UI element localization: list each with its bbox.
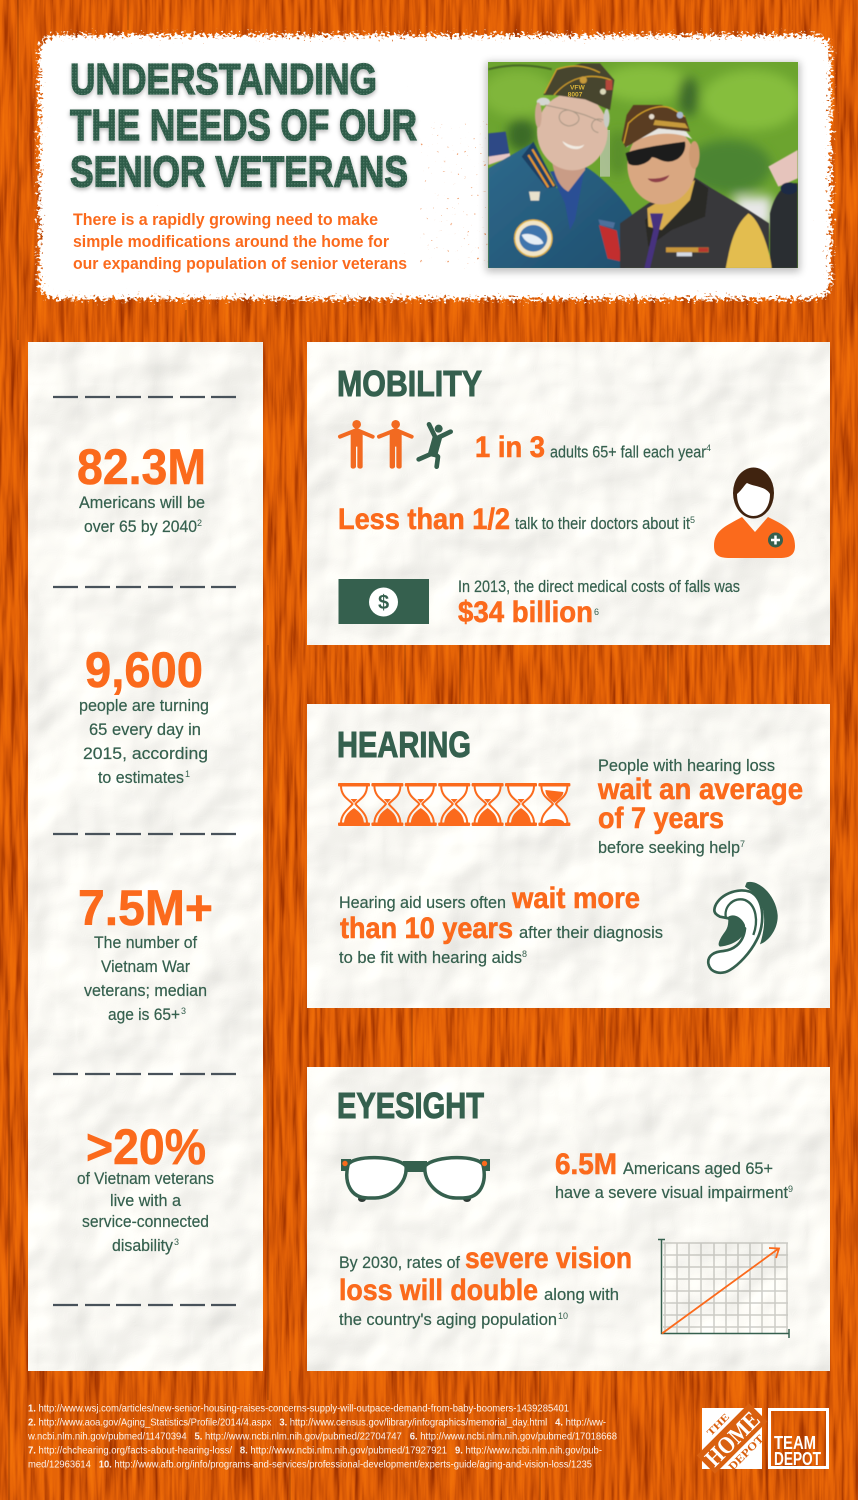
logo: The Home Depot: HOME <box>701 1407 766 1472</box>
stat: >20%: live with a <box>110 1192 182 1210</box>
footnote references: med/12963614 10. http://www.afb.org/info/programs-and-services/professional-development/experts-guide/aging-and-vision-loss/1235 <box>28 1460 592 1470</box>
text: severe vision loss will double: along with <box>544 1286 619 1304</box>
panel: eyesight <box>307 1067 830 1371</box>
line chart: doubling trend <box>658 1240 789 1338</box>
panel: hearing <box>307 704 830 1008</box>
icon: glasses <box>341 1158 490 1202</box>
stat: >20% <box>77 1119 214 1255</box>
text: wait more than 10 years: Hearing aid users often <box>339 894 506 912</box>
stat: 1 in 3 adults <box>475 431 711 464</box>
stat: 7.5M+: veterans; median <box>84 982 207 1000</box>
stat: 6.5M: have a severe visual impairment <box>555 1184 788 1202</box>
stat: 1 in 3 adults: adults 65+ fall each year <box>550 444 706 462</box>
text: wait more than 10 years: after their diagnosis <box>519 924 663 942</box>
logo: The Home Depot: DEPOT <box>726 1432 767 1473</box>
heading: eyesight: EYESIGHT <box>337 1085 484 1126</box>
stat: 7.5M+: The number of <box>94 934 197 952</box>
intro text: simple modifications around the home for <box>73 232 389 251</box>
stat: 7.5M+: age is 65+ <box>108 1006 180 1024</box>
text: severe vision loss will double: By 2030, rates of <box>339 1254 460 1272</box>
logo: The Home Depot <box>689 1395 777 1483</box>
photo: two senior veterans: 8007 <box>568 91 583 98</box>
stat: 9,600: people are turning <box>79 697 209 715</box>
divider stitches <box>53 397 236 1305</box>
panel: mobility <box>307 342 830 645</box>
stat: >20%: 3 <box>174 1237 179 1247</box>
stat: 6.5M: 6.5M <box>555 1148 617 1181</box>
stat: >20%: >20% <box>86 1119 206 1175</box>
stat: 6.5M <box>555 1148 793 1202</box>
stat: 9,600 <box>79 642 209 787</box>
text: severe vision loss will double: severe vision <box>465 1242 632 1275</box>
logo: The Home Depot: THE <box>705 1411 732 1438</box>
title: THE NEEDS OF OUR <box>70 101 417 150</box>
text: wait more than 10 years: than 10 years <box>340 912 513 945</box>
stat: less than half: Less than 1/2 <box>338 503 510 536</box>
text: severe vision loss will double: loss will double <box>339 1274 538 1307</box>
stat: 82.3M: Americans will be <box>79 494 205 512</box>
stat: >20%: service-connected <box>82 1213 209 1231</box>
stat: 9,600: 2015, according <box>83 745 208 763</box>
stat: 7.5M+ <box>78 880 213 1024</box>
stat: 1 in 3 adults: 4 <box>706 443 711 453</box>
text: wait an average of 7 years: 7 <box>740 839 745 849</box>
icon: ear with hearing aid <box>708 882 778 973</box>
stat: 82.3M: 82.3M <box>77 439 206 495</box>
heading: mobility: MOBILITY <box>337 363 482 404</box>
stat: 9,600: to estimates <box>98 769 184 787</box>
stat: 9,600: 65 every day in <box>89 721 201 739</box>
icon: dollar bill <box>338 579 429 624</box>
text: wait an average of 7 years: of 7 years <box>598 802 724 835</box>
text: severe vision loss will double <box>339 1242 632 1329</box>
text: severe vision loss will double: 10 <box>558 1311 568 1321</box>
photo: two senior veterans <box>482 62 802 272</box>
stat: 82.3M: 2 <box>197 518 202 528</box>
footnote references: 1. http://www.wsj.com/articles/new-senior-housing-raises-concerns-supply-will-outpace-demand-from-baby-boomers-1439285401 <box>28 1404 569 1414</box>
stat: medical costs: $34 billion <box>458 596 593 629</box>
footnote references: 7. http://chchearing.org/facts-about-hearing-loss/ 8. http://www.ncbi.nlm.nih.gov/pubmed/17927921 9. http://www.ncbi.nlm.nih.gov/pub- <box>28 1446 602 1456</box>
intro text: There is a rapidly growing need to make <box>73 210 378 229</box>
icon: dollar bill: $ <box>378 592 389 614</box>
stat: 9,600: 9,600 <box>85 642 203 698</box>
text: wait an average of 7 years: People with hearing loss <box>598 757 775 775</box>
stat: 9,600: 1 <box>185 769 190 779</box>
title: SENIOR VETERANS <box>70 148 408 196</box>
panel: key statistics <box>28 342 263 1371</box>
logo: Team Depot <box>770 1410 828 1469</box>
stat: medical costs: 6 <box>594 607 599 617</box>
stat: 82.3M: over 65 by 2040 <box>84 518 197 536</box>
title <box>70 55 417 196</box>
stat: medical costs: In 2013, the direct medical costs of falls was <box>458 578 740 596</box>
intro text: our expanding population of senior veterans <box>73 254 407 273</box>
stat: less than half: talk to their doctors about it <box>515 515 690 533</box>
text: wait more than 10 years <box>339 882 663 967</box>
text: wait more than 10 years: 8 <box>522 949 527 959</box>
stat: >20%: disability <box>112 1237 174 1255</box>
text: severe vision loss will double: the country's aging population <box>339 1311 557 1329</box>
stat: medical costs <box>458 578 740 629</box>
stat: 82.3M <box>77 439 206 536</box>
intro text <box>73 210 407 273</box>
text: wait an average of 7 years: wait an average <box>597 773 803 806</box>
text: wait an average of 7 years: before seeking help <box>598 839 740 857</box>
text: wait more than 10 years: wait more <box>511 882 640 915</box>
footnote references <box>27 1404 617 1470</box>
stat: 6.5M: 9 <box>788 1184 793 1194</box>
photo: two senior veterans: VFW <box>570 84 586 91</box>
footnote references: w.ncbi.nlm.nih.gov/pubmed/11470394 5. http://www.ncbi.nlm.nih.gov/pubmed/22704747 6. http://www.ncbi.nlm.nih.gov/pubmed/17018668 <box>27 1432 617 1442</box>
stat: 7.5M+: 7.5M+ <box>78 880 213 936</box>
stat: less than half <box>338 503 695 536</box>
logo: Team Depot: DEPOT <box>774 1449 821 1469</box>
icon: doctor <box>714 468 795 558</box>
logo: Team Depot: TEAM <box>774 1433 816 1453</box>
stat: 7.5M+: Vietnam War <box>101 958 190 976</box>
icon: seven hourglasses <box>338 783 570 826</box>
stat: >20%: of Vietnam veterans <box>77 1170 214 1188</box>
stat: less than half: 5 <box>690 515 695 525</box>
stat: 1 in 3 adults: 1 in 3 <box>475 431 545 464</box>
footnote references: 2. http://www.aoa.gov/Aging_Statistics/Profile/2014/4.aspx 3. http://www.census.gov/library/infographics/memorial_day.html 4. http://ww- <box>28 1418 606 1428</box>
stat: 6.5M: Americans aged 65+ <box>623 1160 773 1178</box>
title: UNDERSTANDING <box>70 55 377 104</box>
text: wait an average of 7 years <box>597 757 803 857</box>
text: wait more than 10 years: to be fit with hearing aids <box>339 949 522 967</box>
icon: three people, one falling <box>340 420 451 469</box>
heading: hearing: HEARING <box>337 724 471 765</box>
stat: 7.5M+: 3 <box>181 1006 186 1016</box>
